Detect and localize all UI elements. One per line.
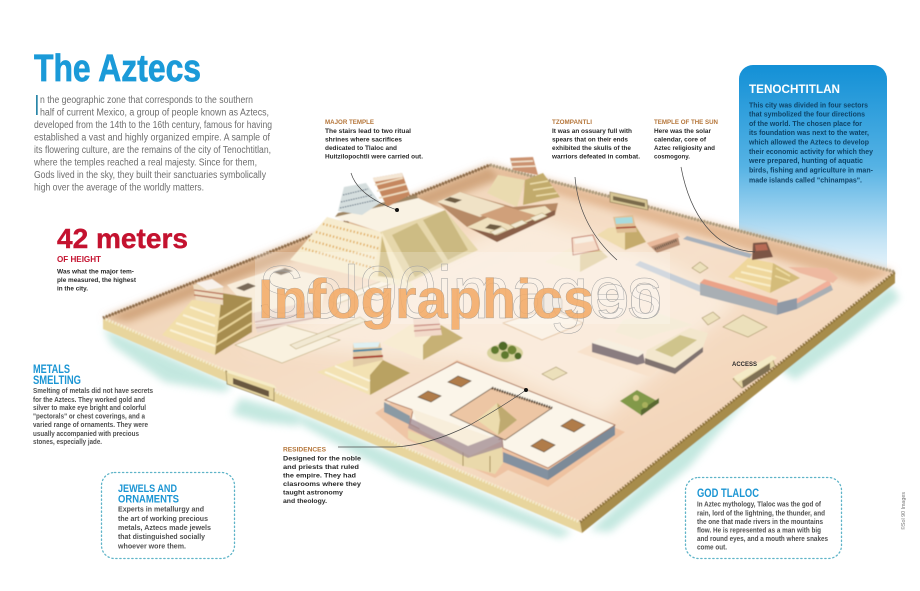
label: Major Temple <box>325 119 423 160</box>
callout: 42 meters <box>57 223 188 292</box>
building: pale central platform <box>503 291 583 340</box>
credit: ©Sol 90 Images <box>900 491 907 530</box>
label: Metals smelting <box>33 364 153 446</box>
label: Residences: the empire. They had <box>283 472 356 480</box>
building: eastern palace <box>577 313 708 377</box>
label: Major Temple: shrines where sacrifices <box>325 136 402 144</box>
label: Major Temple: dedicated to Tlaloc and <box>325 145 397 152</box>
building: colonnade <box>647 233 680 253</box>
text block: introduction: established a vast and highly organized empire. A sample of <box>34 132 270 144</box>
label: Metals smelting: varied range of ornaments. They were <box>33 422 148 429</box>
watermark: Sol90images <box>258 251 662 334</box>
leader line: Temple of the Sun <box>681 167 755 252</box>
label: Access: ACCESS <box>732 361 758 368</box>
label: Major Temple: Huitzilopochtli were carried out. <box>325 154 423 160</box>
callout: 42 meters: ple measured, the highest <box>57 277 137 284</box>
small shrines <box>542 262 767 380</box>
text block: introduction: n the geographic zone that corresponds to the southern <box>40 95 253 106</box>
text block: introduction: where the temples reached a real majesty. Since for them, <box>33 158 257 168</box>
label: Major Temple: MAJOR TEMPLE <box>325 119 375 126</box>
sunken courts <box>418 376 585 452</box>
text block: Tenochtitlan description: their economic activity for which they <box>749 149 873 156</box>
callout: 42 meters: OF HEIGHT <box>57 254 102 264</box>
label: Residences <box>283 446 361 505</box>
gate: southwest <box>226 369 277 401</box>
building: pink shrine pyramid <box>545 235 608 272</box>
label: Residences: taught astronomy <box>283 490 343 496</box>
panel: Tenochtitlan <box>739 65 887 290</box>
title: The Aztecs <box>34 48 201 90</box>
label: Metals smelting: SMELTING <box>33 375 81 387</box>
building: left pyramid <box>162 279 252 355</box>
panel: Jewels and ornaments <box>102 472 234 558</box>
gate: access <box>733 355 777 388</box>
label: Residences: RESIDENCES <box>283 446 327 454</box>
label: Metals smelting: usually accompanied with precious <box>33 431 139 438</box>
text block: introduction <box>33 95 272 194</box>
label: Metals smelting: METALS <box>33 364 70 376</box>
label: Tzompantli: It was an ossuary full with <box>552 128 632 135</box>
platform base <box>103 165 895 525</box>
shrine: Huitzilopochtli <box>373 173 410 207</box>
panel: God Tlaloc: the one that made rivers in the mountains <box>697 519 823 526</box>
text block: introduction: half of current Mexico, a group of people known as Aztecs, <box>40 108 269 118</box>
panel: God Tlaloc <box>686 478 842 558</box>
building: residences palace <box>375 360 625 487</box>
building: blue shrine pyramid <box>597 215 646 250</box>
watermark: Infographics <box>258 267 594 330</box>
label: Metals smelting: silver to make eye bright and colorful <box>33 405 146 412</box>
panel: Jewels and ornaments: ORNAMENTS <box>118 494 179 506</box>
illustration: city of Tenochtitlan <box>103 157 900 538</box>
trees: square garden <box>620 390 659 416</box>
building: major temple <box>290 173 478 290</box>
label: Tzompantli: spears that on their ends <box>552 136 628 144</box>
building: back temple <box>487 157 560 207</box>
label: Metals smelting: stones, especially jade. <box>33 439 102 446</box>
water around the platform <box>103 285 900 538</box>
text block: Tenochtitlan description <box>748 102 874 184</box>
label: Residences: and theology. <box>283 498 327 505</box>
text block: introduction: high over the average of the worldly matters. <box>34 182 204 194</box>
text block: introduction: its flowering culture, are the remains of the city of Tenochtitlan, <box>34 145 271 156</box>
text block: Tenochtitlan description: made islands called "chinampas". <box>749 178 862 184</box>
panel: God Tlaloc: GOD TLALOC <box>697 488 759 500</box>
label: Temple of the Sun: Aztec religiosity and <box>654 145 715 152</box>
building: western palace <box>227 267 327 333</box>
leader line: Major Temple <box>351 173 399 212</box>
text block: Tenochtitlan description: birds, fishing and agriculture in man- <box>749 168 874 174</box>
text block: introduction: Gods lived in the sky, they built their sanctuaries symbolically <box>34 170 266 181</box>
text block: Tenochtitlan description: of the world. The chosen place for <box>749 121 862 128</box>
label: Temple of the Sun <box>654 119 718 160</box>
text block: Tenochtitlan description: which allowed the Aztecs to develop <box>748 140 869 146</box>
panel: Jewels and ornaments: Experts in metallurgy and <box>118 506 204 514</box>
label: Temple of the Sun: calendar, core of <box>654 136 707 144</box>
label: Major Temple: The stairs lead to two ritual <box>325 128 411 135</box>
panel: God Tlaloc: rain, lord of the lightning, the thunder, and <box>697 510 825 518</box>
panel: God Tlaloc: flow. He is represented as a man with big <box>697 528 821 534</box>
outer walls <box>103 318 582 533</box>
avenue with low walls <box>235 213 547 363</box>
label: Temple of the Sun: TEMPLE OF THE SUN <box>654 119 718 126</box>
label: Temple of the Sun: Here was the solar <box>654 128 711 135</box>
label: Tzompantli <box>551 119 640 160</box>
label: Residences: clasrooms where they <box>283 481 361 488</box>
label: Residences: and priests that ruled <box>283 464 359 471</box>
text block: Tenochtitlan description: This city was divided in four sectors <box>749 102 868 110</box>
panel: God Tlaloc: In Aztec mythology, Tlaloc was the god of <box>697 502 822 508</box>
building: front pyramid <box>317 342 410 395</box>
text block: Tenochtitlan description: that symbolized the four directions <box>749 112 865 118</box>
trees: garden <box>487 342 523 362</box>
compound: Temple of the Sun <box>635 236 838 315</box>
panel: Jewels and ornaments: metals, Aztecs made jewels <box>118 525 211 532</box>
pyramid: Temple of the Sun <box>728 242 800 293</box>
callout: 42 meters: in the city. <box>57 286 88 292</box>
label: Tzompantli: warriors defeated in combat. <box>551 154 640 160</box>
callout: 42 meters: Was what the major tem- <box>57 268 134 276</box>
building: central pyramid <box>382 315 463 360</box>
text block: Tenochtitlan description: its foundation was next to the water, <box>749 130 869 137</box>
gate: north <box>610 192 648 210</box>
panel: Jewels and ornaments: whoever wore them. <box>117 544 186 550</box>
label: Residences: Designed for the noble <box>283 456 361 462</box>
text block: introduction: developed from the 14th to the 16th century, famous for having <box>34 120 272 131</box>
shrine: Tlaloc <box>338 183 380 215</box>
building: courtyard complex <box>437 192 558 242</box>
label: Temple of the Sun: cosmogony. <box>654 154 690 160</box>
leader line: Tzompantli <box>575 177 617 260</box>
label: Metals smelting: "pectorals" or chest coverings, and a <box>33 414 145 420</box>
label: Tzompantli: TZOMPANTLI <box>552 119 592 126</box>
watermark: 90 <box>596 276 662 329</box>
text block: Tenochtitlan description: were prepared, hunting of aquatic <box>748 158 863 165</box>
heading: Tenochtitlan: TENOCHTITLAN <box>749 82 840 96</box>
panel: Jewels and ornaments: the art of working precious <box>118 516 208 523</box>
panel: God Tlaloc: and round eyes, and a mouth where snakes <box>697 536 828 543</box>
label: Metals smelting: for the Aztecs. They worked gold and <box>33 397 145 404</box>
callout: 42 meters: 42 meters <box>57 223 188 254</box>
leader line: Residences <box>338 388 528 447</box>
panel: God Tlaloc: come out. <box>697 544 727 552</box>
panel: Jewels and ornaments: JEWELS AND <box>118 483 177 495</box>
panel: Jewels and ornaments: that distinguished socially <box>118 534 205 541</box>
label: Metals smelting: Smelting of metals did not have secrets <box>33 388 153 395</box>
label: Tzompantli: exhibited the skulls of the <box>552 145 631 152</box>
